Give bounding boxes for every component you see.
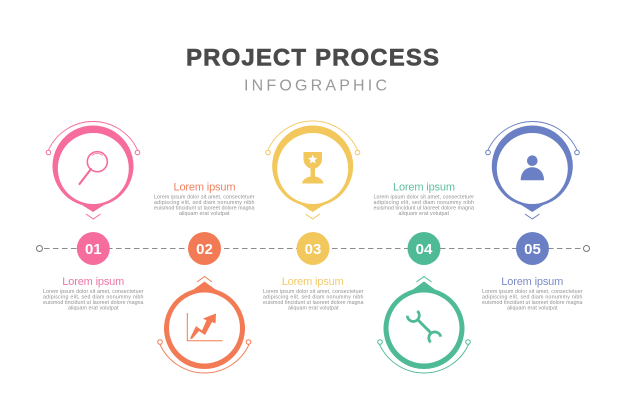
text block: step 1: euismod tincidunt ut laoreet dolore magna <box>43 300 144 306</box>
text block: step 5: adipiscing elit, sed diam nonummy nibh <box>482 295 583 301</box>
step 5: person <box>482 122 583 312</box>
step 1: research <box>43 122 144 311</box>
text block: step 3: adipiscing elit, sed diam nonummy nibh <box>263 295 364 301</box>
pin: step 4 <box>378 276 470 373</box>
text block: step 4 <box>374 182 474 217</box>
text block: step 5: Lorem ipsum <box>501 276 563 288</box>
text block: step 5 <box>482 276 583 312</box>
number badge 04 <box>408 232 440 265</box>
icon: wrench <box>407 311 441 342</box>
number badge 03: 03 <box>305 241 321 258</box>
icon: growth chart <box>187 313 222 341</box>
icon: trophy <box>302 152 324 184</box>
number badge 01 <box>77 232 110 265</box>
text block: step 1: Lorem ipsum <box>62 276 124 288</box>
number badge 05: 05 <box>524 241 541 258</box>
text block: step 3: Lorem ipsum <box>282 276 344 288</box>
text block: step 2: euismod tincidunt ut laoreet dolore magna <box>154 206 255 212</box>
text block: step 1: adipiscing elit, sed diam nonummy nibh <box>43 295 144 301</box>
text block: step 4: Lorem ipsum dolor sit amet, consectetuer <box>374 194 474 200</box>
subtitle: INFOGRAPHIC <box>244 78 387 94</box>
pin: step 5 <box>486 122 579 219</box>
title: PROJECT PROCESS <box>186 44 439 72</box>
text block: step 3: Lorem ipsum dolor sit amet, consectetuer <box>263 289 364 295</box>
text block: step 3 <box>263 276 364 312</box>
pin: step 1 <box>46 122 140 219</box>
text block: step 5: euismod tincidunt ut laoreet dolore magna <box>482 300 583 306</box>
text block: step 5: aliquam erat volutpat <box>507 306 558 312</box>
text block: step 4: adipiscing elit, sed diam nonummy nibh <box>374 200 474 206</box>
text block: step 4: Lorem ipsum <box>393 182 455 194</box>
icon: magnifier <box>80 152 107 184</box>
text block: step 5: Lorem ipsum dolor sit amet, consectetuer <box>482 289 583 295</box>
number badge 04: 04 <box>416 241 433 258</box>
pin: step 3 <box>266 121 360 219</box>
text block: step 1 <box>43 276 144 312</box>
text block: step 2: Lorem ipsum dolor sit amet, consectetuer <box>154 194 255 200</box>
step 2: growth <box>154 182 255 373</box>
pin: step 2 <box>158 276 251 373</box>
text block: step 2: Lorem ipsum <box>174 182 236 194</box>
number badge 05 <box>516 232 549 265</box>
text block: step 2 <box>154 182 255 217</box>
text block: step 4: aliquam erat volutpat <box>398 211 450 217</box>
text block: step 1: Lorem ipsum dolor sit amet, consectetuer <box>43 289 144 295</box>
number badge 03 <box>296 232 330 265</box>
text block: step 4: euismod tincidunt ut laoreet dolore magna <box>374 206 474 212</box>
text block: step 3: euismod tincidunt ut laoreet dolore magna <box>263 300 364 306</box>
text block: step 1: aliquam erat volutpat <box>68 306 119 312</box>
timeline dashed line <box>36 246 590 252</box>
text block: step 3: aliquam erat volutpat <box>288 306 339 312</box>
number badge 02: 02 <box>196 241 213 258</box>
icon: person <box>521 155 544 180</box>
step 3: trophy <box>263 121 364 311</box>
text block: step 2: aliquam erat volutpat <box>179 211 230 217</box>
text block: step 2: adipiscing elit, sed diam nonummy nibh <box>154 200 255 206</box>
number badge 02 <box>188 232 221 265</box>
step 4: tools <box>374 182 474 373</box>
number badge 01: 01 <box>85 241 102 258</box>
